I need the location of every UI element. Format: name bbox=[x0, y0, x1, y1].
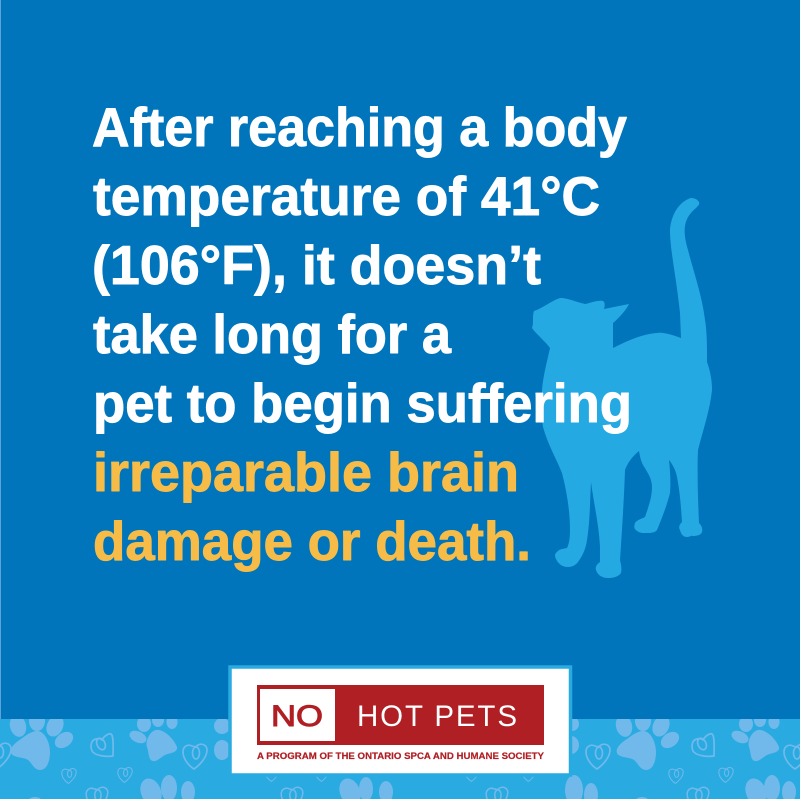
patterned paw band bbox=[0, 711, 800, 799]
highlighted statement: damage or death. bbox=[93, 510, 531, 572]
white statement: temperature of 41°C bbox=[93, 165, 600, 227]
white statement: pet to begin suffering bbox=[93, 372, 632, 434]
paw pattern bbox=[7, 711, 796, 799]
white statement: (106°F), it doesn’t bbox=[92, 234, 541, 296]
logo red banner bbox=[257, 685, 544, 745]
logo NO box bbox=[260, 689, 335, 741]
cat silhouette bbox=[532, 198, 712, 578]
headline text bbox=[92, 96, 632, 572]
heart pattern bbox=[0, 734, 800, 799]
white statement: take long for a bbox=[93, 303, 451, 365]
logo: No Hot Pets bbox=[230, 667, 570, 775]
logo subtitle: A PROGRAM OF THE ONTARIO SPCA AND HUMANE SOCIETY bbox=[257, 751, 545, 762]
highlighted statement: irreparable brain bbox=[93, 441, 519, 503]
white statement: After reaching a body bbox=[92, 96, 627, 158]
white statement bbox=[92, 96, 632, 434]
logo HOT PETS text: HOT PETS bbox=[357, 700, 517, 733]
highlighted statement bbox=[93, 441, 531, 572]
logo NO text: NO bbox=[271, 700, 323, 733]
